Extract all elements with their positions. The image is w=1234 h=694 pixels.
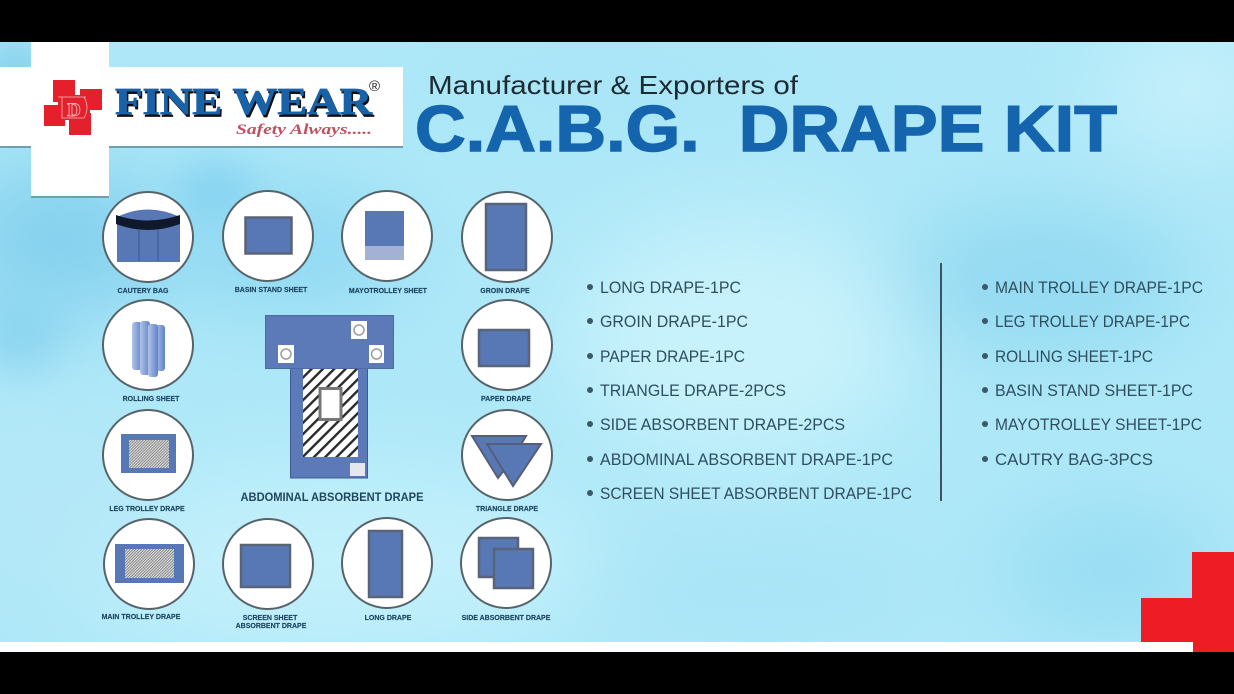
tag — [350, 463, 365, 476]
list: right column — [982, 279, 1203, 469]
item: screen sheet absorbent drape: SCREEN SHEET — [243, 615, 298, 622]
item: basin stand sheet — [223, 191, 313, 294]
item: rolling sheet: ROLLING SHEET — [123, 396, 180, 403]
item: long drape — [342, 518, 432, 622]
item: triangle drape — [462, 410, 552, 513]
item: groin drape — [462, 192, 552, 295]
item: leg trolley drape — [103, 410, 193, 513]
list: right column: CAUTRY BAG-3PCS — [995, 451, 1153, 469]
item: groin drape: GROIN DRAPE — [480, 288, 530, 295]
list: left column: SIDE ABSORBENT DRAPE-2PCS — [600, 416, 845, 434]
brand name: FINE WEAR — [115, 81, 373, 123]
registered mark: ® — [369, 78, 380, 95]
item: paper drape — [462, 300, 552, 403]
item: basin stand sheet: BASIN STAND SHEET — [235, 287, 308, 294]
red cross corner — [1141, 552, 1234, 652]
absorbent hatch — [303, 369, 358, 457]
list: left column — [587, 279, 912, 503]
drape body — [290, 365, 368, 478]
fenestration — [320, 388, 341, 420]
caption: ABDOMINAL ABSORBENT DRAPE — [240, 492, 424, 504]
item: mayotrolley sheet — [342, 191, 432, 295]
white cross logo panel — [0, 42, 403, 198]
title: C.A.B.G. DRAPE KIT — [415, 92, 1117, 165]
list: right column: MAIN TROLLEY DRAPE-1PC — [995, 279, 1203, 297]
port 1 — [351, 321, 367, 339]
item: rolling sheet — [103, 300, 193, 403]
port 3 — [369, 345, 384, 363]
icon: red crosses — [44, 80, 102, 135]
list: right column: BASIN STAND SHEET-1PC — [995, 382, 1193, 400]
item: cautery bag: CAUTERY BAG — [118, 288, 169, 295]
item: long drape: LONG DRAPE — [365, 615, 412, 622]
item: leg trolley drape: LEG TROLLEY DRAPE — [109, 506, 185, 513]
list: left column: GROIN DRAPE-1PC — [600, 313, 748, 331]
item: cautery bag — [103, 192, 193, 295]
item: side absorbent drape — [461, 518, 551, 622]
item: mayotrolley sheet: MAYOTROLLEY SHEET — [349, 288, 428, 295]
item: main trolley drape — [102, 519, 194, 621]
item: main trolley drape: MAIN TROLLEY DRAPE — [102, 614, 181, 621]
item: abdominal absorbent drape — [240, 316, 424, 504]
item: side absorbent drape: SIDE ABSORBENT DRAPE — [462, 615, 551, 622]
port 2 — [278, 345, 294, 363]
icon: red crosses: D — [67, 100, 81, 121]
list: left column: PAPER DRAPE-1PC — [600, 348, 745, 366]
brand name: FINE WEAR — [116, 84, 374, 126]
item: triangle drape: TRIANGLE DRAPE — [476, 506, 538, 513]
list: left column: LONG DRAPE-1PC — [600, 279, 741, 297]
logo — [44, 78, 380, 138]
list: right column: ROLLING SHEET-1PC — [995, 348, 1153, 366]
heading: manufacturer: Manufacturer & Exporters of — [428, 70, 799, 100]
list: left column: TRIANGLE DRAPE-2PCS — [600, 382, 786, 400]
list: right column: MAYOTROLLEY SHEET-1PC — [995, 416, 1202, 434]
bottom white strip — [0, 642, 1193, 652]
item: paper drape: PAPER DRAPE — [481, 396, 531, 403]
item: screen sheet absorbent drape: ABSORBENT DRAPE — [236, 623, 307, 630]
tagline: Safety Always..... — [236, 122, 372, 138]
item: screen sheet absorbent drape — [223, 519, 313, 630]
list: left column: ABDOMINAL ABSORBENT DRAPE-1PC — [600, 451, 893, 469]
list: right column: LEG TROLLEY DRAPE-1PC — [995, 313, 1190, 331]
list: left column: SCREEN SHEET ABSORBENT DRAPE-1PC — [600, 485, 912, 503]
